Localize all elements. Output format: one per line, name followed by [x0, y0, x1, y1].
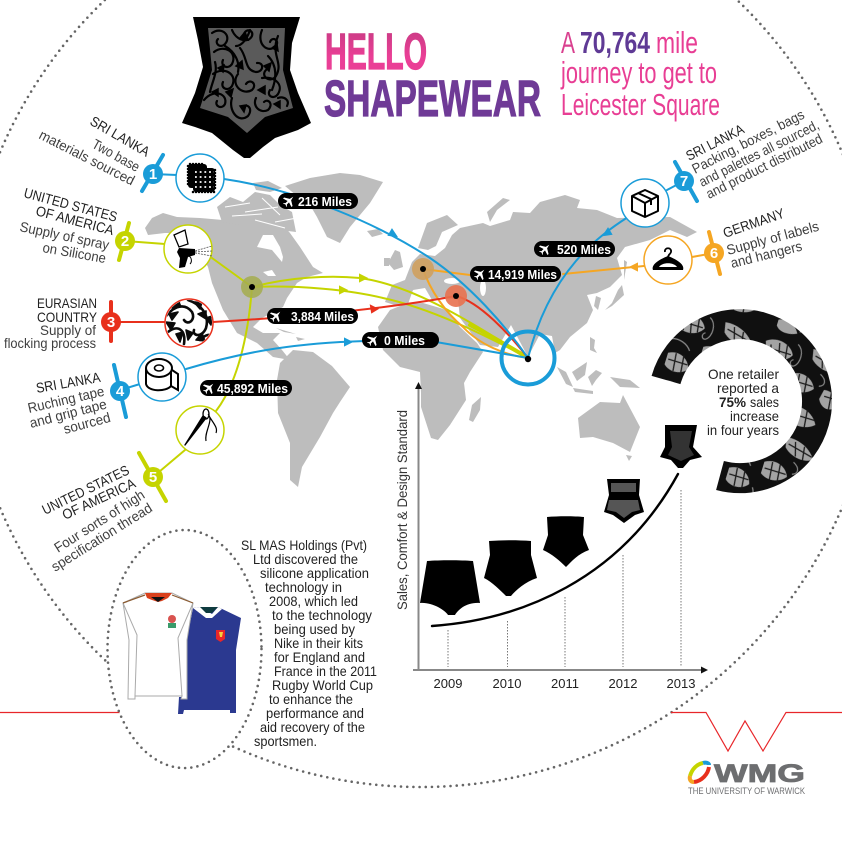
label 7: and product distributed: [703, 130, 825, 202]
pin 3: [101, 302, 121, 341]
label 2: on Silicone: [41, 239, 107, 266]
rugby text: to the technology: [272, 607, 372, 623]
rugby text: to enhance the: [269, 691, 353, 707]
stop 6: [644, 205, 821, 284]
rugby text: France in the 2011: [274, 663, 377, 679]
pin 5: [139, 453, 166, 501]
icon: needle and thread: [176, 406, 224, 454]
France shirt: [178, 607, 241, 714]
stop 1: [37, 113, 224, 202]
destination marker: [502, 332, 554, 384]
rugby text: being used by: [274, 621, 355, 637]
label 7: and palettes all sourced,: [696, 116, 821, 190]
footer red line left: [0, 712, 120, 714]
garment 2013: [660, 425, 702, 468]
donut callout text: [707, 366, 779, 438]
rugby text: technology in: [265, 579, 342, 595]
label 4: sourced: [62, 409, 112, 437]
donut callout text: reported a: [717, 380, 779, 396]
pill: 216 miles: 216 Miles: [298, 194, 352, 209]
dotted ellipse: [108, 530, 262, 768]
subtitle: mile: [656, 25, 698, 60]
label 1: Two base: [90, 136, 143, 175]
rugby text: 2008, which led: [269, 593, 358, 609]
pin 7: [674, 162, 697, 201]
route: orange lines: [423, 253, 714, 358]
label 6: [721, 205, 821, 271]
subtitle: Leicester Square: [561, 87, 720, 122]
node: Germany: [412, 258, 434, 280]
pill: 3,884 miles: 3,884 Miles: [291, 309, 354, 324]
stop 3: [4, 295, 214, 351]
footer red line with W shape: [671, 712, 842, 751]
pin 5: 5: [149, 469, 157, 486]
subtitle: [560, 25, 720, 122]
rugby text: for England and: [274, 649, 365, 665]
icon: flocking pattern: [165, 299, 214, 347]
route: blue lines: [120, 174, 684, 390]
year labels: 2013: [667, 676, 695, 691]
pin 1: 1: [149, 166, 157, 183]
WMG logo: THE UNIVERSITY OF WARWICK: [688, 786, 805, 796]
icon: tape roll: [138, 353, 186, 401]
icon: spray gun: [164, 225, 212, 273]
England shirt: [123, 593, 193, 699]
donut callout text: increase: [730, 408, 779, 424]
pin 4: 4: [116, 383, 125, 400]
stop 5: [39, 406, 224, 575]
rugby kit panel: [108, 530, 377, 768]
subtitle: A: [561, 25, 575, 60]
rugby text: Rugby World Cup: [272, 677, 373, 693]
rugby text: SL MAS Holdings (Pvt): [241, 537, 367, 553]
pill: 45,892 miles: 45,892 Miles: [217, 381, 288, 396]
lace donut: [666, 324, 817, 478]
label 4: and grip tape: [28, 396, 108, 431]
year labels: [434, 676, 695, 691]
garment 2009: [420, 560, 480, 615]
WMG logo: [688, 760, 805, 796]
label 5: specification thread: [48, 500, 155, 575]
pill: 520 miles: 520 Miles: [557, 242, 611, 257]
year labels: 2011: [551, 676, 579, 691]
rugby text: sportsmen.: [254, 733, 317, 749]
rugby text: Nike in their kits: [274, 635, 363, 651]
stop 7: [621, 106, 825, 227]
label 4: SRI LANKA: [35, 369, 102, 396]
pin 4: [110, 365, 130, 417]
label 5: Four sorts of high: [51, 486, 147, 556]
label 2: OF AMERICA: [34, 202, 116, 238]
label 4: [26, 369, 112, 437]
label 3: EURASIAN: [37, 295, 97, 311]
pill: 216 miles: [278, 193, 358, 209]
garment 2011: [543, 516, 589, 567]
icon: fabric swatches: [176, 154, 224, 202]
WMG logo: WMG: [714, 760, 805, 788]
pin 6: 6: [710, 245, 718, 262]
rugby text: [241, 537, 377, 749]
pin 1: [142, 155, 163, 191]
label 7: SRI LANKA: [683, 121, 747, 164]
label 3: flocking process: [4, 335, 96, 351]
donut callout text: One retailer: [708, 366, 779, 382]
pin 6: [704, 232, 724, 274]
pin 7: 7: [680, 173, 688, 190]
rugby text: aid recovery of the: [260, 719, 365, 735]
pill: 14,919 miles: [470, 266, 561, 282]
year drop lines: [448, 490, 681, 667]
icon: cardboard box: [621, 179, 669, 227]
label 2: UNITED STATES: [22, 184, 119, 225]
year labels: 2009: [434, 676, 462, 691]
label 3: [4, 295, 98, 351]
subtitle: journey to get to: [560, 55, 717, 90]
garment 2012: [604, 479, 644, 523]
icon: coat hanger: [644, 236, 692, 284]
label 7: Packing, boxes, bags: [689, 106, 807, 177]
pill: 3,884 miles: [267, 308, 358, 324]
rugby text: performance and: [266, 705, 364, 721]
route: red lines: [111, 296, 528, 358]
label 1: materials sourced: [37, 126, 137, 188]
pin 2: 2: [121, 233, 129, 250]
pill: 0 miles: [362, 332, 439, 348]
label 4: Ruching tape: [26, 383, 106, 416]
pill: 14,919 miles: 14,919 Miles: [488, 267, 557, 282]
label 6: GERMANY: [721, 205, 787, 241]
axes: [413, 382, 708, 674]
node: USA: [241, 276, 263, 298]
pill: 0 miles: 0 Miles: [384, 333, 425, 348]
pin 2: [115, 223, 165, 260]
label 3: Supply of: [40, 322, 96, 338]
label 6: and hangers: [729, 238, 804, 271]
sales chart: [394, 382, 708, 691]
label 2: Supply of spray: [18, 218, 111, 253]
year labels: 2012: [609, 676, 637, 691]
logo mark: [690, 763, 709, 782]
route: lime lines from USA to destination: [153, 258, 528, 477]
rugby text: Ltd discovered the: [253, 551, 358, 567]
title: HELLO: [325, 23, 427, 80]
label 5: [39, 462, 155, 575]
world map: [145, 173, 697, 487]
subtitle: 70,764: [580, 25, 651, 60]
pin 3: 3: [107, 314, 115, 331]
title: [324, 23, 541, 127]
garment 2010: [484, 540, 537, 596]
donut callout text: 75%: [719, 394, 747, 410]
donut callout text: in four years: [707, 422, 779, 438]
title: SHAPEWEAR: [324, 70, 541, 127]
label 6: Supply of labels: [725, 218, 821, 258]
label 5: UNITED STATES: [39, 462, 132, 518]
stop 4: [26, 353, 186, 437]
pill: 520 miles: [534, 241, 615, 257]
rugby text: silicone application: [260, 565, 369, 581]
y axis title: Sales, Comfort & Design Standard: [394, 410, 410, 610]
stop 2: [18, 184, 212, 273]
label 3: COUNTRY: [37, 309, 98, 325]
node: Eurasian country: [445, 285, 467, 307]
shapewear hero garment: [182, 17, 311, 158]
growth curve: [432, 474, 678, 626]
label 2: [18, 184, 119, 266]
label 5: OF AMERICA: [60, 475, 138, 523]
year labels: 2010: [493, 676, 521, 691]
donut callout text: sales: [750, 394, 779, 410]
label 1: SRI LANKA: [88, 113, 153, 160]
